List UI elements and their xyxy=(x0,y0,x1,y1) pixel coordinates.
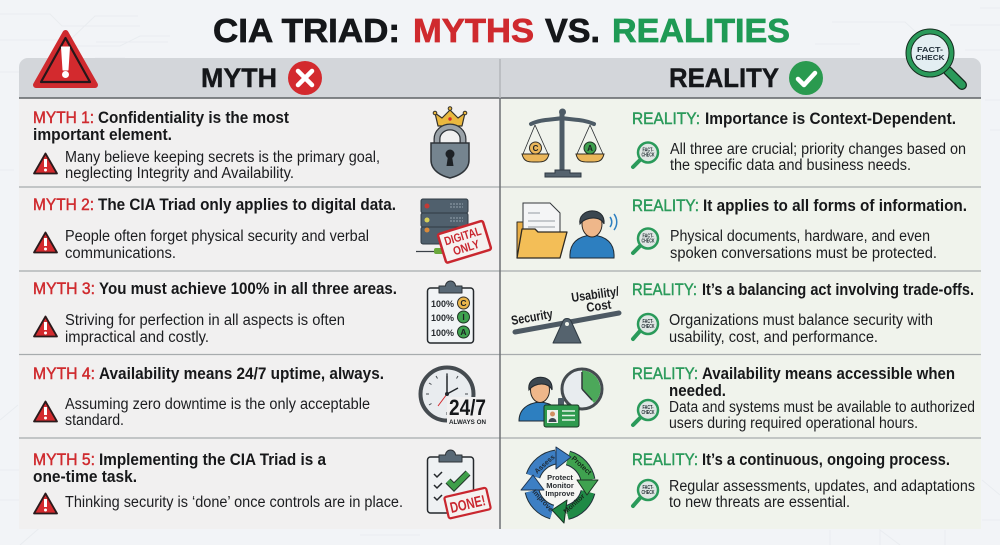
reality 3 description xyxy=(669,312,933,346)
myth 1 xyxy=(33,107,469,182)
reality 1 heading: Importance is Context-Dependent. xyxy=(705,109,956,128)
reality 5 xyxy=(521,447,975,523)
icon: fact-check small: FACT- xyxy=(642,405,654,411)
myth 4 description: standard. xyxy=(65,412,124,429)
reality 5 heading: It’s a continuous, ongoing process. xyxy=(702,450,950,469)
reality 4 xyxy=(519,364,975,432)
icon: fact-check small: CHECK xyxy=(642,238,655,244)
reality 4 heading: REALITY: xyxy=(632,364,698,383)
icon: clipboard done stamp: DONE! xyxy=(448,492,487,517)
reality 4 heading xyxy=(632,364,955,400)
myth 5 heading: MYTH 5: xyxy=(33,450,95,469)
icon: clipboard 100 percent: I xyxy=(462,312,465,322)
icon: 24/7 clock: ALWAYS ON xyxy=(449,419,486,426)
title xyxy=(213,12,790,49)
icon: large fact-check magnifier xyxy=(906,29,962,85)
reality 4 description: users during required operational hours. xyxy=(669,415,918,432)
reality 5 description: to new threats are essential. xyxy=(669,494,850,511)
icon: fact-check small: CHECK xyxy=(642,490,655,496)
icon: balance scales: A xyxy=(587,144,593,153)
icon: warning xyxy=(34,402,57,422)
heading: myth column: MYTH xyxy=(201,63,277,93)
myth 1 heading: Confidentiality is the most xyxy=(98,108,289,127)
myth 5 heading: Implementing the CIA Triad is a xyxy=(99,450,326,469)
myth 1 heading: important element. xyxy=(33,125,172,144)
reality 1 xyxy=(522,108,966,177)
reality 4 description xyxy=(669,399,975,432)
reality 3 description: Organizations must balance security with xyxy=(669,312,933,329)
icon: continuous improvement cycle: Protect xyxy=(547,473,573,482)
myth 1 description: neglecting Integrity and Availability. xyxy=(65,165,294,182)
icon: clipboard 100 percent: 100% xyxy=(431,299,455,310)
icon: clipboard 100 percent: 100% xyxy=(431,313,455,324)
myth 3 heading: You must achieve 100% in all three areas. xyxy=(99,279,397,298)
icon: 24/7 clock: 24/7 xyxy=(449,395,486,420)
myth 2 heading: The CIA Triad only applies to digital data. xyxy=(98,195,396,214)
myth 3 description: Striving for perfection in all aspects is often xyxy=(65,312,345,329)
icon: fact-check small xyxy=(633,228,658,253)
icon: fact-check small xyxy=(633,480,658,506)
panel: myth column xyxy=(19,98,500,529)
icon: clipboard 100 percent: C xyxy=(460,298,467,308)
icon: fact-check small: FACT- xyxy=(642,319,654,325)
reality 1 description: All three are crucial; priority changes based on xyxy=(670,141,966,158)
icon: balance scales xyxy=(522,108,604,177)
myth 5 xyxy=(33,450,491,519)
myth 2 xyxy=(33,195,491,263)
icon: balance scales: C xyxy=(533,144,539,153)
myth 2 description: People often forget physical security and verbal xyxy=(65,228,369,245)
icon: server with digital only stamp xyxy=(416,199,491,263)
myth 1 heading: MYTH 1: xyxy=(33,108,94,127)
myth 5 heading: one-time task. xyxy=(33,467,137,486)
icon: large fact-check magnifier: FACT- xyxy=(917,45,944,54)
myth 3 heading: MYTH 3: xyxy=(33,279,95,298)
icon: continuous improvement cycle: Improve xyxy=(545,489,575,498)
icon: folder with documents xyxy=(517,203,567,258)
myth 3 xyxy=(33,279,474,346)
icon: fact-check small: CHECK xyxy=(642,152,655,158)
icon: padlock with crown xyxy=(431,107,469,178)
reality 1 description: the specific data and business needs. xyxy=(670,157,911,174)
icon: warning xyxy=(34,154,57,174)
icon: fact-check small: FACT- xyxy=(642,485,654,491)
icon: continuous improvement cycle xyxy=(521,447,598,523)
title: REALITIES xyxy=(612,12,790,49)
heading: myth column xyxy=(201,61,322,95)
icon: continuous improvement cycle: Assess xyxy=(534,454,557,475)
icon: fact-check small xyxy=(633,142,658,167)
icon: large warning triangle xyxy=(36,33,95,85)
myth 4 description xyxy=(65,396,370,429)
icon: fact-check small: FACT- xyxy=(642,234,654,240)
reality 2 description xyxy=(670,228,937,262)
icon: red cross xyxy=(288,61,322,95)
myth 1 description xyxy=(65,149,380,182)
panel: reality column xyxy=(500,98,981,529)
icon: fact-check small: CHECK xyxy=(642,410,655,416)
icon: server with digital only stamp: DIGITAL xyxy=(443,224,483,248)
icon: continuous improvement cycle: Improve xyxy=(531,489,554,514)
icon: large fact-check magnifier: CHECK xyxy=(916,53,945,62)
icon: fact-check small: FACT- xyxy=(642,148,654,154)
myth 3 description xyxy=(65,312,345,346)
reality 3 description: usability, cost, and performance. xyxy=(669,329,878,346)
reality 5 heading: REALITY: xyxy=(632,450,698,469)
icon: security usability seesaw: Cost xyxy=(585,297,613,315)
title: VS. xyxy=(545,12,600,49)
icon: 24/7 clock xyxy=(420,368,489,427)
icon: continuous improvement cycle: Protect xyxy=(570,455,593,477)
reality 2 xyxy=(517,196,967,262)
heading: reality column: REALITY xyxy=(669,63,779,93)
icon: continuous improvement cycle: Monitor xyxy=(563,493,587,515)
myth 1 description: Many believe keeping secrets is the primary goal, xyxy=(65,149,380,166)
panel: table header bar xyxy=(19,58,981,98)
icon: fact-check small xyxy=(633,314,658,339)
icon: fact-check small: CHECK xyxy=(642,324,655,330)
icon: warning xyxy=(34,316,57,336)
icon: continuous improvement cycle: Monitor xyxy=(546,481,574,490)
myth 2 description xyxy=(65,228,369,262)
myth 4 heading: MYTH 4: xyxy=(33,364,95,383)
myth 1 heading xyxy=(33,108,289,144)
reality 2 description: Physical documents, hardware, and even xyxy=(670,228,930,245)
reality 4 heading: needed. xyxy=(669,381,726,400)
icon: clipboard 100 percent: 100% xyxy=(431,328,455,339)
myth 4 xyxy=(33,364,489,429)
heading: reality column xyxy=(669,61,823,95)
icon: server with digital only stamp: ONLY xyxy=(451,237,481,258)
icon: clipboard 100 percent: A xyxy=(460,327,467,337)
myth 4 heading: Availability means 24/7 uptime, always. xyxy=(99,364,384,383)
reality 3 heading: REALITY: xyxy=(632,280,697,299)
reality 2 description: spoken conversations must be protected. xyxy=(670,245,937,262)
reality 2 heading: REALITY: xyxy=(632,196,699,215)
reality 4 heading: Availability means accessible when xyxy=(702,364,955,383)
icon: green check xyxy=(789,61,823,95)
title: CIA TRIAD: xyxy=(213,12,400,49)
reality 2 heading: It applies to all forms of information. xyxy=(703,196,967,215)
reality 1 heading: REALITY: xyxy=(632,109,700,128)
icon: speaking person xyxy=(570,211,617,258)
myth 4 description: Assuming zero downtime is the only acceptable xyxy=(65,396,370,413)
reality 5 description xyxy=(669,478,975,511)
icon: clipboard done stamp xyxy=(428,450,491,519)
title: MYTHS xyxy=(413,12,534,49)
icon: warning xyxy=(34,494,57,514)
icon: warning xyxy=(34,232,57,252)
reality 3 xyxy=(510,280,974,346)
reality 5 description: Regular assessments, updates, and adaptations xyxy=(669,478,975,495)
myth 2 description: communications. xyxy=(65,245,176,262)
reality 1 description xyxy=(670,141,966,174)
icon: clipboard 100 percent xyxy=(428,281,474,343)
icon: person clock badge xyxy=(519,369,602,427)
icon: fact-check small xyxy=(633,400,658,425)
reality 5 heading xyxy=(632,450,950,469)
myth 5 description: Thinking security is ‘done’ once controls are in place. xyxy=(65,494,403,511)
icon: security usability seesaw: Usability/ xyxy=(570,283,620,305)
icon: security usability seesaw: Security xyxy=(510,306,554,328)
myth 3 description: impractical and costly. xyxy=(65,329,209,346)
myth 2 heading: MYTH 2: xyxy=(33,195,94,214)
icon: security usability seesaw xyxy=(510,283,620,343)
myth 5 heading xyxy=(33,450,326,486)
